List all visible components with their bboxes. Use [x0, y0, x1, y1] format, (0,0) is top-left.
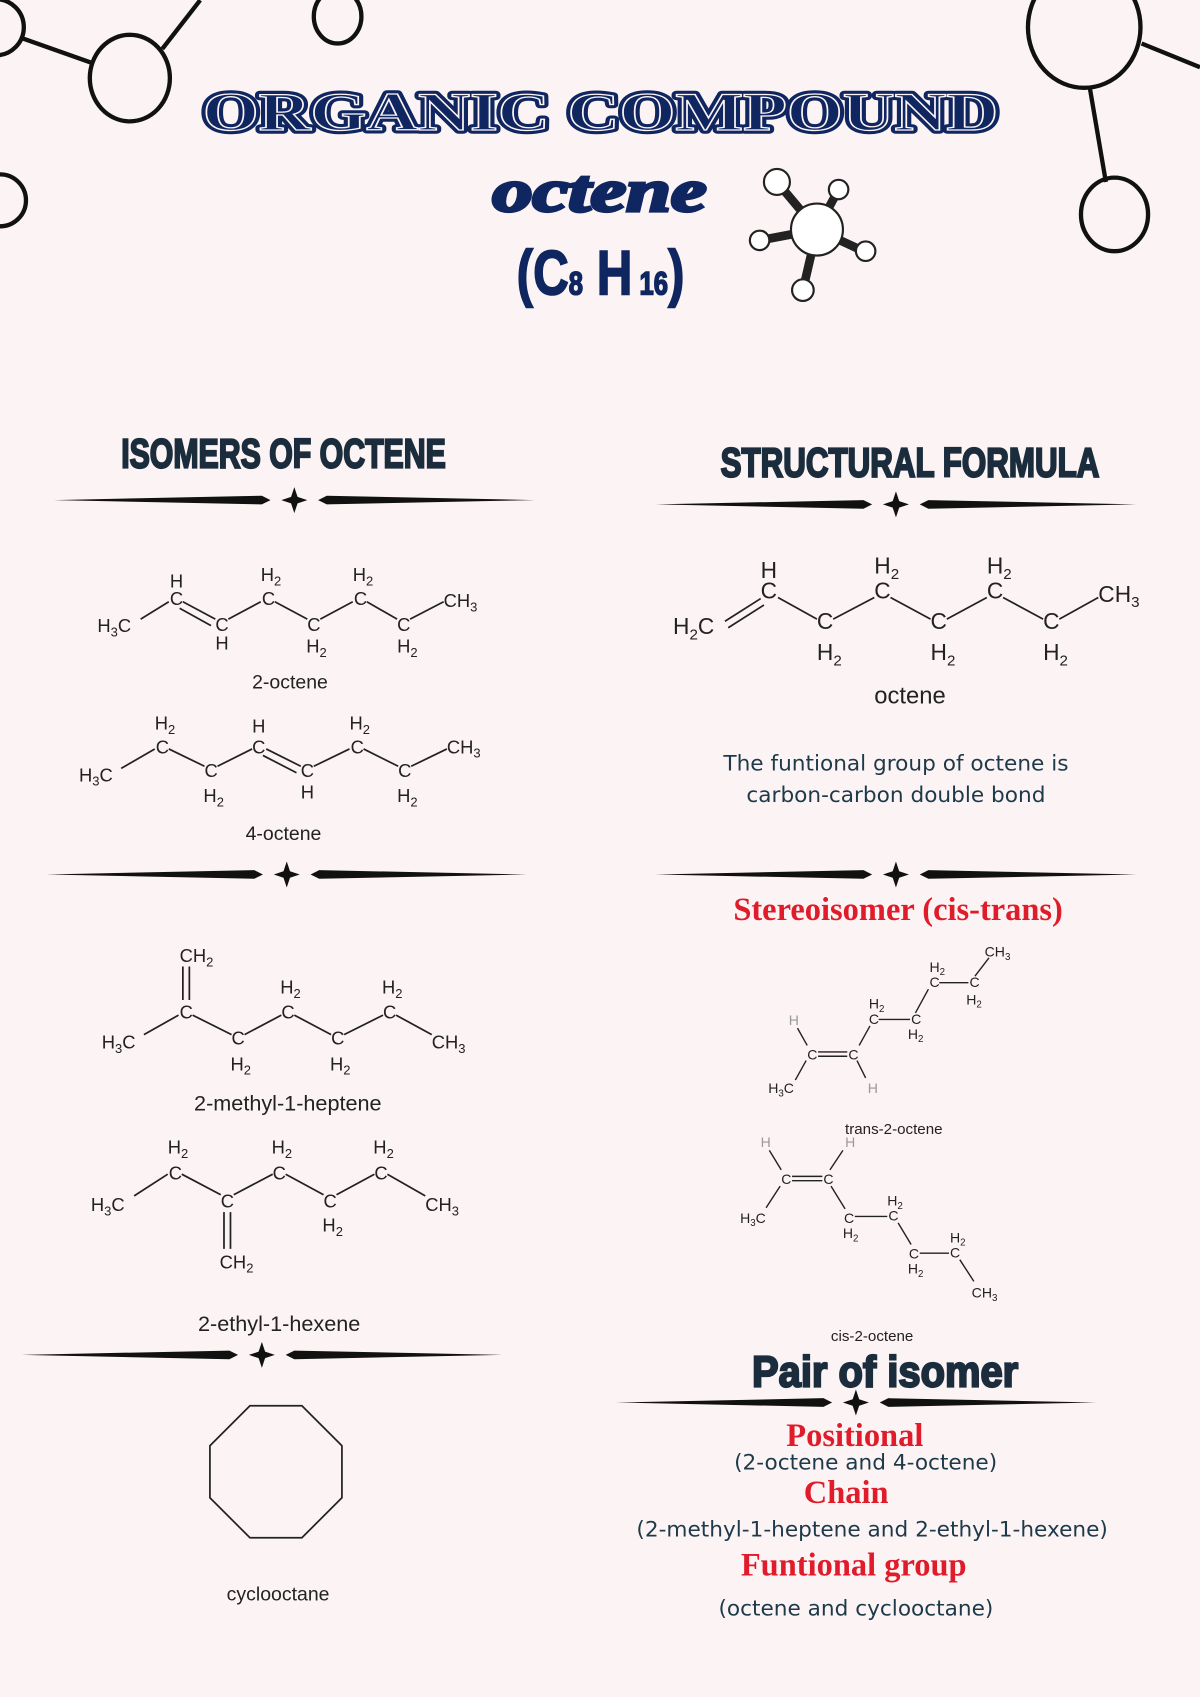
title: ORGANIC COMPOUND — [203, 82, 998, 142]
molecule: 2-ethyl-1-hexene — [91, 1137, 459, 1336]
molecule: 2-octene: C — [118, 615, 131, 636]
heading: stereoisomer: Stereoisomer (cis-trans) — [733, 892, 1063, 928]
molecule: cis-2-octene: 2 — [960, 1238, 966, 1249]
molecule: 2-methyl-1-heptene: H — [382, 976, 395, 997]
molecule: octene structural — [673, 553, 1140, 710]
molecule: cis-2-octene: 3 — [992, 1293, 997, 1304]
molecule: cis-2-octene: H — [740, 1210, 750, 1226]
molecule: cis-2-octene: C — [844, 1210, 854, 1226]
molecule: 2-ethyl-1-hexene: 3 — [452, 1203, 459, 1218]
list: isomer pairs: (2-octene and 4-octene) — [734, 1451, 997, 1476]
molecule: 2-methyl-1-heptene: C — [383, 1001, 396, 1022]
molecule: cis-2-octene: C — [888, 1208, 899, 1224]
molecule: 2-ethyl-1-hexene: C — [221, 1191, 234, 1212]
molecule: octene structural: H — [987, 553, 1003, 579]
molecule: 4-octene: 2 — [217, 794, 224, 809]
molecule: cis-2-octene: CH — [972, 1285, 992, 1301]
molecule: 2-ethyl-1-hexene: C — [169, 1163, 182, 1184]
molecule: 2-ethyl-1-hexene: H — [91, 1194, 104, 1215]
molecule: octene structural: H — [1043, 639, 1060, 665]
molecule: 4-octene: H — [252, 716, 265, 737]
molecule: cis-2-octene: H — [908, 1261, 918, 1277]
heading: pair of isomer: Pair of isomer — [752, 1348, 1018, 1396]
molecule: 2-ethyl-1-hexene: 2 — [246, 1261, 253, 1276]
list: isomer pairs: (octene and cyclooctane) — [718, 1597, 993, 1622]
molecule: 4-octene — [79, 712, 481, 845]
molecule: octene structural: C — [1043, 608, 1060, 634]
molecule: 2-octene: 2-octene — [252, 671, 328, 693]
molecule: 4-octene: 2 — [410, 794, 418, 809]
molecule: 2-ethyl-1-hexene: H — [168, 1137, 181, 1158]
molecule: 2-ethyl-1-hexene: H — [322, 1215, 336, 1236]
molecule: 2-octene: 2 — [366, 574, 373, 589]
molecule: 2-ethyl-1-hexene: H — [272, 1137, 285, 1158]
molecule: 2-octene: 2 — [274, 574, 281, 589]
molecule: 4-octene: 3 — [473, 746, 481, 761]
molecule: cis-2-octene: H — [887, 1193, 897, 1209]
molecule: trans-2-octene: H — [908, 1026, 918, 1042]
molecule: cyclooctane — [210, 1406, 342, 1606]
molecule: octene structural: H — [673, 613, 689, 639]
molecule: 4-octene: H — [397, 785, 410, 806]
molecule: 2-methyl-1-heptene: C — [281, 1001, 295, 1022]
molecule: 2-octene: C — [170, 588, 183, 609]
molecule: cis-2-octene — [740, 1134, 997, 1345]
molecule: cis-2-octene: C — [823, 1171, 834, 1187]
molecule: trans-2-octene: H — [929, 959, 940, 975]
molecule: octene structural: C — [817, 608, 833, 634]
molecule: 2-ethyl-1-hexene: C — [324, 1191, 337, 1212]
molecule: octene structural: CH — [1098, 581, 1131, 607]
molecule: 4-octene: C — [99, 764, 113, 785]
molecule: 2-octene: H — [306, 636, 320, 657]
molecule: octene structural: 3 — [1131, 594, 1140, 611]
molecule: 2-ethyl-1-hexene: CH — [425, 1194, 452, 1215]
molecule: octene structural: C — [874, 578, 891, 604]
molecule: octene structural: 2 — [947, 653, 955, 670]
molecule: 2-ethyl-1-hexene: 2-ethyl-1-hexene — [198, 1311, 360, 1336]
molecule: 2-octene: C — [307, 614, 321, 635]
molecule: trans-2-octene: C — [929, 974, 940, 990]
molecule: 2-ethyl-1-hexene: C — [111, 1194, 125, 1215]
molecule: 2-methyl-1-heptene: 2 — [395, 986, 402, 1001]
molecule: trans-2-octene: C — [970, 974, 980, 990]
molecule: octene structural: 2 — [891, 566, 899, 583]
molecule: 2-methyl-1-heptene: 2 — [244, 1063, 251, 1078]
molecule: 4-octene: C — [351, 736, 364, 757]
molecule: 2-octene: 2 — [320, 645, 327, 660]
molecule: octene structural: octene — [874, 683, 946, 710]
molecule: 2-octene: H — [215, 632, 229, 653]
molecule: octene structural: H — [761, 557, 777, 583]
molecule: 4-octene: C — [205, 760, 218, 781]
molecule: 2-methyl-1-heptene: H — [330, 1053, 343, 1074]
molecule: trans-2-octene: C — [848, 1047, 858, 1063]
list: isomer pairs: Funtional group — [741, 1548, 967, 1584]
molecule: cis-2-octene: H — [761, 1134, 771, 1150]
molecule: 2-ethyl-1-hexene: 2 — [336, 1224, 343, 1239]
molecule: cis-2-octene: cis-2-octene — [831, 1328, 913, 1345]
list: isomer pairs: Chain — [804, 1475, 889, 1511]
molecule: 2-methyl-1-heptene: C — [331, 1027, 344, 1048]
text: functional group note: The funtional group of octene is — [722, 752, 1069, 777]
molecule: cis-2-octene: H — [845, 1134, 855, 1150]
molecule: 2-ethyl-1-hexene: 2 — [181, 1146, 188, 1161]
molecule: cis-2-octene: H — [950, 1229, 960, 1245]
molecule: cis-2-octene: 2 — [853, 1233, 858, 1244]
molecule: cyclooctane: cyclooctane — [227, 1584, 329, 1606]
molecule: 2-methyl-1-heptene: H — [102, 1032, 115, 1053]
molecule: trans-2-octene: C — [911, 1011, 921, 1027]
molecule: 4-octene: CH — [447, 736, 473, 757]
molecule: 2-methyl-1-heptene: 2 — [206, 954, 213, 969]
molecule: cis-2-octene: 2 — [897, 1201, 903, 1212]
molecule: cis-2-octene: C — [756, 1210, 766, 1226]
list: isomer pairs: (2-methyl-1-heptene and 2-ethyl-1-hexene) — [636, 1518, 1108, 1543]
molecule: 4-octene: H — [301, 782, 314, 803]
molecule: octene structural: 2 — [689, 627, 698, 644]
molecule: octene structural: C — [931, 608, 947, 634]
molecule: 2-ethyl-1-hexene: CH — [220, 1251, 246, 1272]
molecule: 4-octene: H — [155, 712, 168, 733]
molecule: 2-octene: H — [397, 636, 410, 657]
molecule: 2-methyl-1-heptene — [102, 945, 466, 1115]
molecule: octene structural: 2 — [1003, 566, 1012, 583]
molecule: 2-octene: C — [215, 614, 229, 635]
text: functional group note: carbon-carbon double bond — [746, 783, 1045, 808]
molecule: 2-methyl-1-heptene: 2-methyl-1-heptene — [194, 1090, 382, 1115]
molecule: cis-2-octene: C — [781, 1171, 791, 1187]
molecule: 2-octene: H — [353, 564, 366, 585]
molecule: cis-2-octene: C — [950, 1245, 960, 1261]
molecule: 2-octene: 3 — [111, 624, 118, 639]
molecule: 4-octene: 4-octene — [246, 823, 321, 845]
molecule: octene structural: 2 — [833, 653, 842, 670]
molecule: 2-methyl-1-heptene: 2 — [294, 986, 301, 1001]
molecule: octene structural: C — [698, 613, 714, 639]
molecule: cis-2-octene: 3 — [750, 1218, 756, 1229]
molecule: octene structural: C — [987, 578, 1003, 604]
molecule: 2-ethyl-1-hexene: H — [373, 1137, 387, 1158]
molecule: trans-2-octene: 2 — [879, 1004, 884, 1015]
heading: isomers: ISOMERS OF OCTENE — [121, 431, 446, 477]
molecule: trans-2-octene: 2 — [918, 1034, 923, 1045]
molecule: 4-octene: 3 — [92, 774, 99, 789]
list: isomer pairs — [636, 1418, 1108, 1622]
molecule: 2-methyl-1-heptene: CH — [432, 1032, 458, 1053]
molecule: trans-2-octene: 3 — [778, 1088, 784, 1099]
molecule: 4-octene: C — [398, 760, 411, 781]
molecule: octene structural: H — [931, 639, 947, 665]
molecule: trans-2-octene: 2 — [976, 1000, 982, 1011]
molecule: 2-methyl-1-heptene: 2 — [343, 1063, 351, 1078]
molecule: trans-2-octene: 2 — [940, 967, 945, 978]
molecule: 2-octene: C — [397, 614, 410, 635]
molecule: cis-2-octene: 2 — [918, 1269, 923, 1280]
molecule: 2-methyl-1-heptene: 3 — [115, 1041, 122, 1056]
molecule: 2-octene: C — [354, 588, 367, 609]
molecule: 2-methyl-1-heptene: 3 — [458, 1041, 466, 1056]
molecule: 2-octene: H — [261, 564, 274, 585]
molecule: octene structural: H — [874, 553, 891, 579]
molecule: trans-2-octene: 3 — [1005, 952, 1010, 963]
molecule: octene structural: C — [761, 578, 777, 604]
molecule: trans-2-octene: C — [784, 1080, 794, 1096]
molecule: 4-octene: 2 — [363, 722, 370, 737]
molecule: trans-2-octene: H — [768, 1080, 778, 1096]
molecule: 2-ethyl-1-hexene: 2 — [285, 1146, 292, 1161]
molecule: trans-2-octene — [768, 944, 1010, 1138]
molecule: 2-octene: C — [262, 588, 275, 609]
molecule: 2-octene: 2 — [410, 645, 418, 660]
list: isomer pairs: Positional — [786, 1418, 923, 1454]
molecule: 4-octene: 2 — [168, 722, 175, 737]
molecule: 4-octene: C — [156, 736, 169, 757]
molecule: trans-2-octene: C — [807, 1047, 817, 1063]
molecule: 2-octene: H — [97, 615, 111, 636]
molecule: cis-2-octene: H — [843, 1225, 853, 1241]
molecule: 4-octene: H — [350, 712, 363, 733]
molecule: trans-2-octene: C — [869, 1011, 879, 1027]
molecule: 2-octene: H — [170, 571, 183, 592]
molecule: 2-ethyl-1-hexene: 3 — [104, 1203, 111, 1218]
title: ORGANIC COMPOUND — [203, 82, 998, 142]
formula C8H16: (C8 H 16) — [517, 238, 684, 308]
molecule: octene structural: H — [817, 639, 833, 665]
molecule: 4-octene: H — [203, 785, 217, 806]
molecule: 4-octene: C — [252, 736, 265, 757]
molecule: 2-methyl-1-heptene: H — [230, 1053, 244, 1074]
decorative molecules — [0, 0, 1200, 251]
molecule: 2-methyl-1-heptene: H — [280, 976, 294, 997]
molecule: 2-ethyl-1-hexene: C — [273, 1163, 286, 1184]
molecule: 2-octene — [97, 564, 477, 693]
molecule: trans-2-octene: H — [869, 996, 879, 1012]
molecule: 2-methyl-1-heptene: C — [122, 1032, 135, 1053]
molecule: trans-2-octene: trans-2-octene — [845, 1121, 943, 1138]
molecule: 2-methyl-1-heptene: CH — [180, 945, 206, 966]
molecule: cis-2-octene: C — [909, 1246, 919, 1262]
molecule: trans-2-octene: H — [868, 1080, 878, 1096]
molecule: 2-methyl-1-heptene: C — [180, 1001, 193, 1022]
molecule: 4-octene: H — [79, 764, 92, 785]
molecule: trans-2-octene: H — [789, 1012, 799, 1028]
molecule: 2-ethyl-1-hexene: 2 — [387, 1146, 394, 1161]
molecule: 2-octene: CH — [444, 590, 470, 611]
icon: molecule — [750, 169, 875, 301]
molecule: trans-2-octene: CH — [985, 944, 1005, 960]
molecule: 2-ethyl-1-hexene: C — [374, 1163, 388, 1184]
molecule: trans-2-octene: H — [966, 991, 976, 1007]
molecule: 2-octene: 3 — [470, 600, 477, 615]
molecule: octene structural: 2 — [1060, 653, 1068, 670]
molecule: 4-octene: C — [301, 760, 314, 781]
subtitle octene: octene — [492, 158, 707, 225]
molecule: 2-methyl-1-heptene: C — [232, 1027, 245, 1048]
